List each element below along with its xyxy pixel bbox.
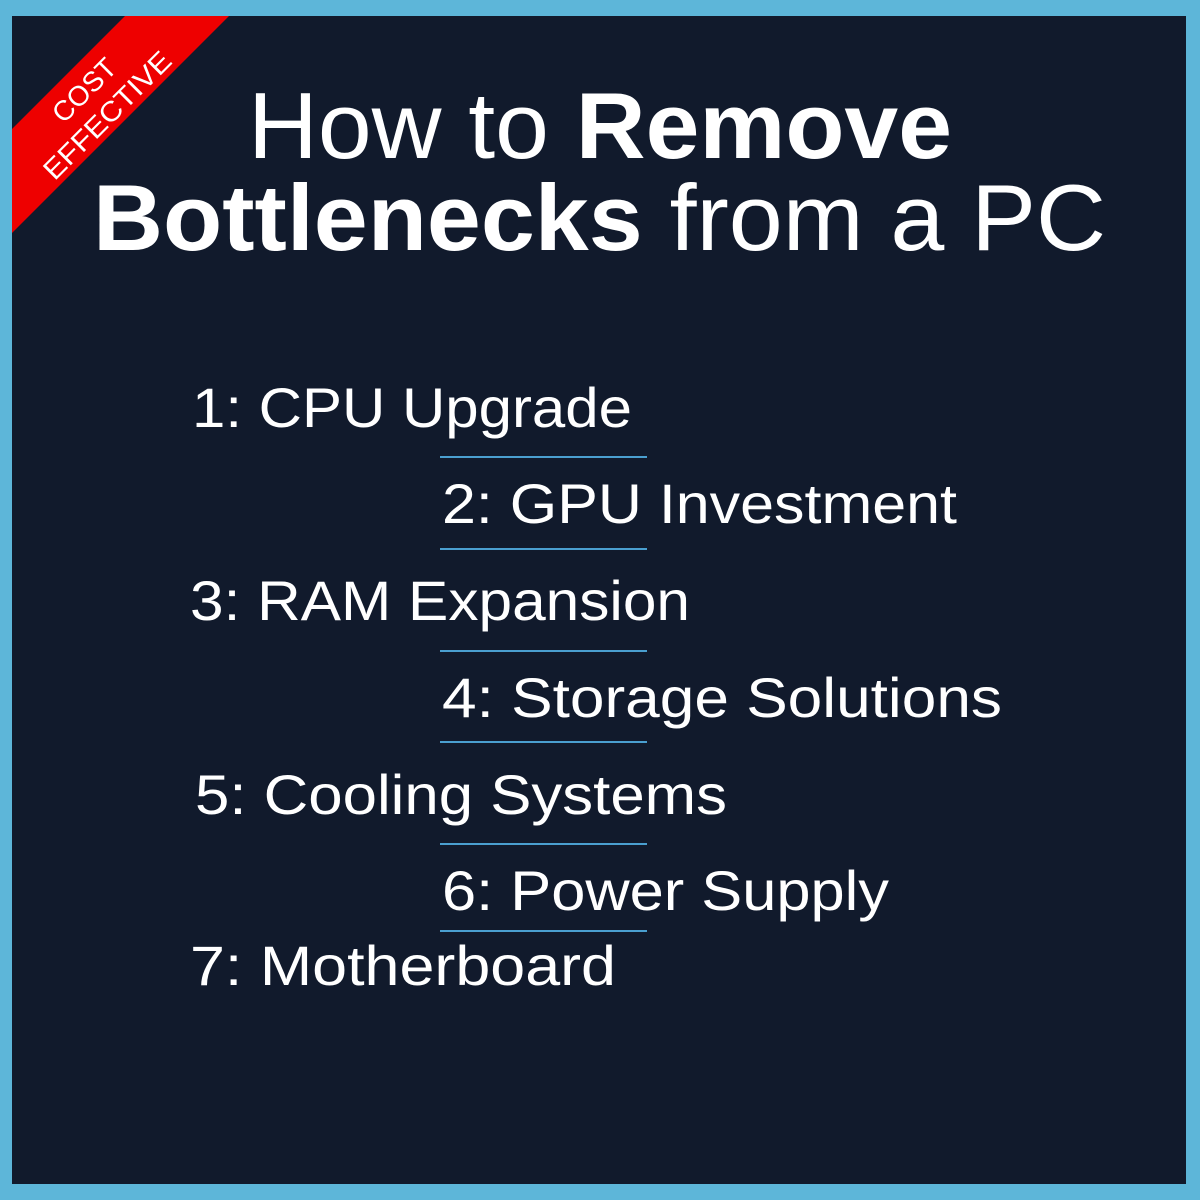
item 5: 5: Cooling Systems: [195, 763, 727, 826]
item 1: 1: CPU Upgrade: [192, 376, 632, 439]
ribbon: cost effective: COST: [46, 52, 123, 129]
item 2: 2: GPU Investment: [442, 472, 957, 535]
item 7: 7: Motherboard: [190, 934, 616, 997]
title: Bottlenecks from a PC: [93, 165, 1106, 270]
list of solutions: [190, 376, 1002, 997]
title: How to Remove: [248, 73, 952, 178]
item 4: 4: Storage Solutions: [442, 666, 1002, 729]
title: [93, 73, 1106, 270]
ribbon: cost effective: EFFECTIVE: [37, 45, 178, 186]
item 3: 3: RAM Expansion: [190, 569, 690, 632]
item 6: 6: Power Supply: [442, 859, 889, 922]
ribbon: cost effective: [12, 16, 229, 233]
